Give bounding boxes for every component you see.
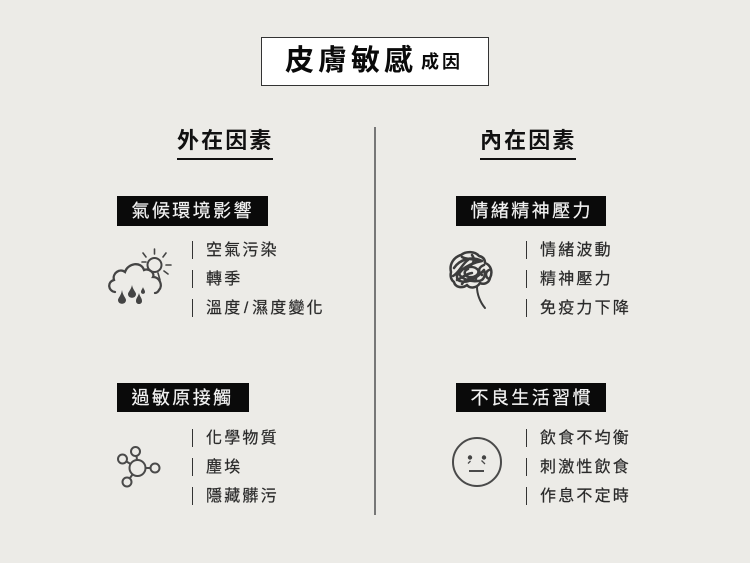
heading: external factors: 外在因素 xyxy=(177,128,273,153)
tag: allergens: 過敏原接觸 xyxy=(132,388,234,408)
tag: climate xyxy=(117,196,268,226)
heading: internal factors: 內在因素 xyxy=(480,128,576,153)
list: allergen factors: 隱藏髒污 xyxy=(206,488,279,505)
icon: cloud with rain and sun xyxy=(108,248,172,304)
tag: climate: 氣候環境影響 xyxy=(132,201,254,221)
tag: lifestyle: 不良生活習慣 xyxy=(470,388,593,408)
tag: lifestyle xyxy=(456,383,606,412)
list: lifestyle factors: 作息不定時 xyxy=(540,488,631,505)
list: climate factors: 空氣污染 xyxy=(206,242,279,259)
list: climate factors: 溫度/濕度變化 xyxy=(206,300,325,317)
list: lifestyle factors: 刺激性飲食 xyxy=(540,459,631,476)
panel: allergens xyxy=(117,383,279,505)
tag: allergens xyxy=(117,383,249,412)
title: 成因 xyxy=(421,52,463,72)
list: emotional factors xyxy=(526,241,631,317)
panel: emotional stress xyxy=(449,196,631,317)
list: lifestyle factors: 飲食不均衡 xyxy=(540,430,631,447)
list: climate factors xyxy=(192,241,325,317)
list: climate factors: 轉季 xyxy=(206,271,242,288)
list: allergen factors: 化學物質 xyxy=(206,430,279,447)
panel: climate and environment xyxy=(108,196,325,317)
list: allergen factors: 塵埃 xyxy=(206,459,242,476)
icon: unhappy face xyxy=(452,437,502,487)
tag: emotion: 情緒精神壓力 xyxy=(470,201,593,221)
icon: scribble brain xyxy=(449,250,493,309)
list: emotional factors: 情緒波動 xyxy=(540,242,613,259)
list: allergen factors xyxy=(192,429,279,505)
tag: emotion xyxy=(456,196,606,226)
list: emotional factors: 免疫力下降 xyxy=(540,300,631,317)
title: 皮膚敏感 xyxy=(285,45,417,77)
center divider xyxy=(374,127,376,515)
list: lifestyle factors xyxy=(526,429,631,505)
list: emotional factors: 精神壓力 xyxy=(540,271,613,288)
icon: molecule xyxy=(117,446,160,488)
panel: poor lifestyle xyxy=(452,383,631,505)
title xyxy=(261,37,489,86)
